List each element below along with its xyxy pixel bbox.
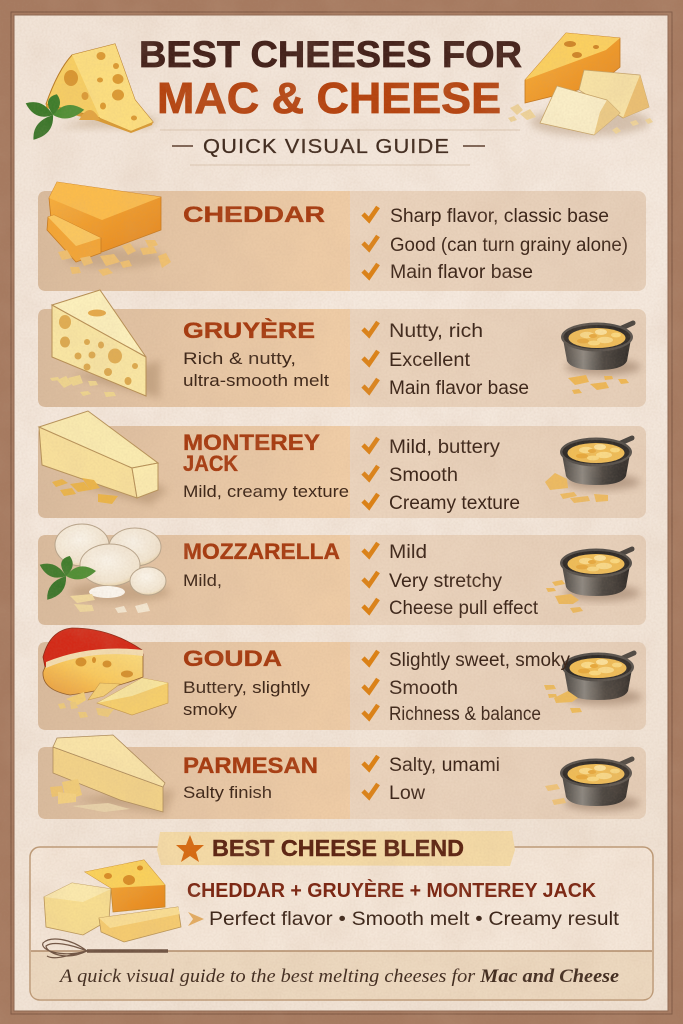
description: mozzarella: Mild, xyxy=(183,571,222,590)
icon: top left swiss cheese wedge xyxy=(46,44,160,133)
icon: mozzarella balls xyxy=(55,524,170,613)
checklist: parmesan xyxy=(363,755,500,804)
panel: parmesan xyxy=(38,735,646,819)
checklist: mozzarella xyxy=(363,542,539,619)
checklist: gouda: Slightly sweet, smoky xyxy=(389,650,570,671)
row background xyxy=(38,535,646,625)
blend box xyxy=(30,847,653,1000)
checklist: cheddar: Sharp flavor, classic base xyxy=(390,206,609,227)
icon: arrow xyxy=(188,912,204,926)
description: gruyere: Rich & nutty, xyxy=(183,349,296,368)
crumbs xyxy=(545,473,608,503)
crumbs xyxy=(545,784,566,805)
checklist: mozzarella: Very stretchy xyxy=(389,571,503,592)
icon: pot of macaroni xyxy=(560,548,640,601)
icon: gouda wheel xyxy=(43,628,168,718)
checklist: gruyere: Main flavor base xyxy=(389,378,529,399)
subtitle: QUICK VISUAL GUIDE xyxy=(203,136,450,158)
heading: monterey jack xyxy=(183,430,320,476)
description: gouda xyxy=(183,678,311,719)
row background xyxy=(38,191,646,291)
description: gruyere xyxy=(183,349,329,390)
description: gouda: Buttery, slightly xyxy=(183,678,311,697)
checklist: gruyere: Nutty, rich xyxy=(389,321,483,342)
heading: monterey jack: JACK xyxy=(183,451,238,476)
heading: gouda: GOUDA xyxy=(183,646,282,671)
icon: pot of macaroni xyxy=(562,652,642,705)
description: gruyere: ultra-smooth melt xyxy=(183,371,329,390)
heading: cheddar: CHEDDAR xyxy=(183,202,325,227)
icon: cheddar block xyxy=(47,182,171,276)
checklist: monterey jack: Mild, buttery xyxy=(389,437,501,458)
checklist: cheddar: Main flavor base xyxy=(390,262,533,283)
icon: top left basil xyxy=(26,94,84,140)
row background xyxy=(38,426,646,518)
icon: blend cheese cubes xyxy=(44,860,181,942)
checklist: monterey jack: Creamy texture xyxy=(389,493,520,514)
row background xyxy=(38,309,646,407)
icon: top right cheese pile xyxy=(508,33,653,136)
crumbs xyxy=(568,375,629,394)
heading: mozzarella: MOZZARELLA xyxy=(183,539,340,564)
icon: star xyxy=(176,835,204,862)
checklist: gouda: Richness & balance xyxy=(389,704,541,725)
icon: monterey jack wedge xyxy=(39,411,168,505)
checklist: mozzarella: Mild xyxy=(389,542,427,563)
panel: cheddar xyxy=(38,182,646,291)
checklist: gruyere xyxy=(363,321,529,399)
heading: blend: BEST CHEESE BLEND xyxy=(212,835,464,861)
blend recipe: CHEDDAR + GRUYÈRE + MONTEREY JACK xyxy=(187,879,597,902)
icon: pot of macaroni xyxy=(561,322,641,375)
description: gouda: smoky xyxy=(183,700,238,719)
checklist: cheddar xyxy=(363,206,628,283)
checklist: gouda xyxy=(363,650,570,725)
checklist: parmesan: Salty, umami xyxy=(389,755,500,776)
panel: monterey jack xyxy=(38,411,646,518)
checklist: gouda: Smooth xyxy=(389,678,458,699)
crumbs xyxy=(546,580,583,613)
heading: parmesan: PARMESAN xyxy=(183,753,318,778)
panel: gruyere xyxy=(38,290,646,407)
heading: gruyere: GRUYÈRE xyxy=(183,318,315,343)
icon: basil xyxy=(40,556,96,600)
checklist: cheddar: Good (can turn grainy alone) xyxy=(390,235,628,256)
icon: pot of macaroni xyxy=(560,758,640,811)
title xyxy=(139,34,522,123)
description: parmesan: Salty finish xyxy=(183,783,272,802)
footer note: A quick visual guide to the best melting cheeses for Mac and Cheese xyxy=(58,966,620,987)
panel: mozzarella xyxy=(38,524,646,625)
crumbs xyxy=(544,685,582,713)
title: MAC & CHEESE xyxy=(157,74,501,123)
blend benefits: Perfect flavor • Smooth melt • Creamy result xyxy=(209,909,620,930)
icon: gruyere wedge xyxy=(50,290,160,398)
checklist: parmesan: Low xyxy=(389,783,425,804)
checklist: mozzarella: Cheese pull effect xyxy=(389,598,539,619)
row background xyxy=(38,642,646,730)
ribbon xyxy=(157,831,515,866)
checklist: monterey jack xyxy=(363,437,520,514)
description: monterey jack: Mild, creamy texture xyxy=(183,482,349,501)
checklist: monterey jack: Smooth xyxy=(389,465,458,486)
checklist: gruyere: Excellent xyxy=(389,350,471,371)
icon: pot of macaroni xyxy=(560,438,640,490)
heading: monterey jack: MONTEREY xyxy=(183,430,320,455)
title: BEST CHEESES FOR xyxy=(139,34,522,75)
panel: gouda xyxy=(38,628,646,730)
row background xyxy=(38,747,646,819)
panel: best cheese blend xyxy=(30,831,653,1000)
icon: parmesan wedge xyxy=(50,735,175,815)
icon: whisk xyxy=(43,939,168,958)
subtitle xyxy=(160,130,520,165)
